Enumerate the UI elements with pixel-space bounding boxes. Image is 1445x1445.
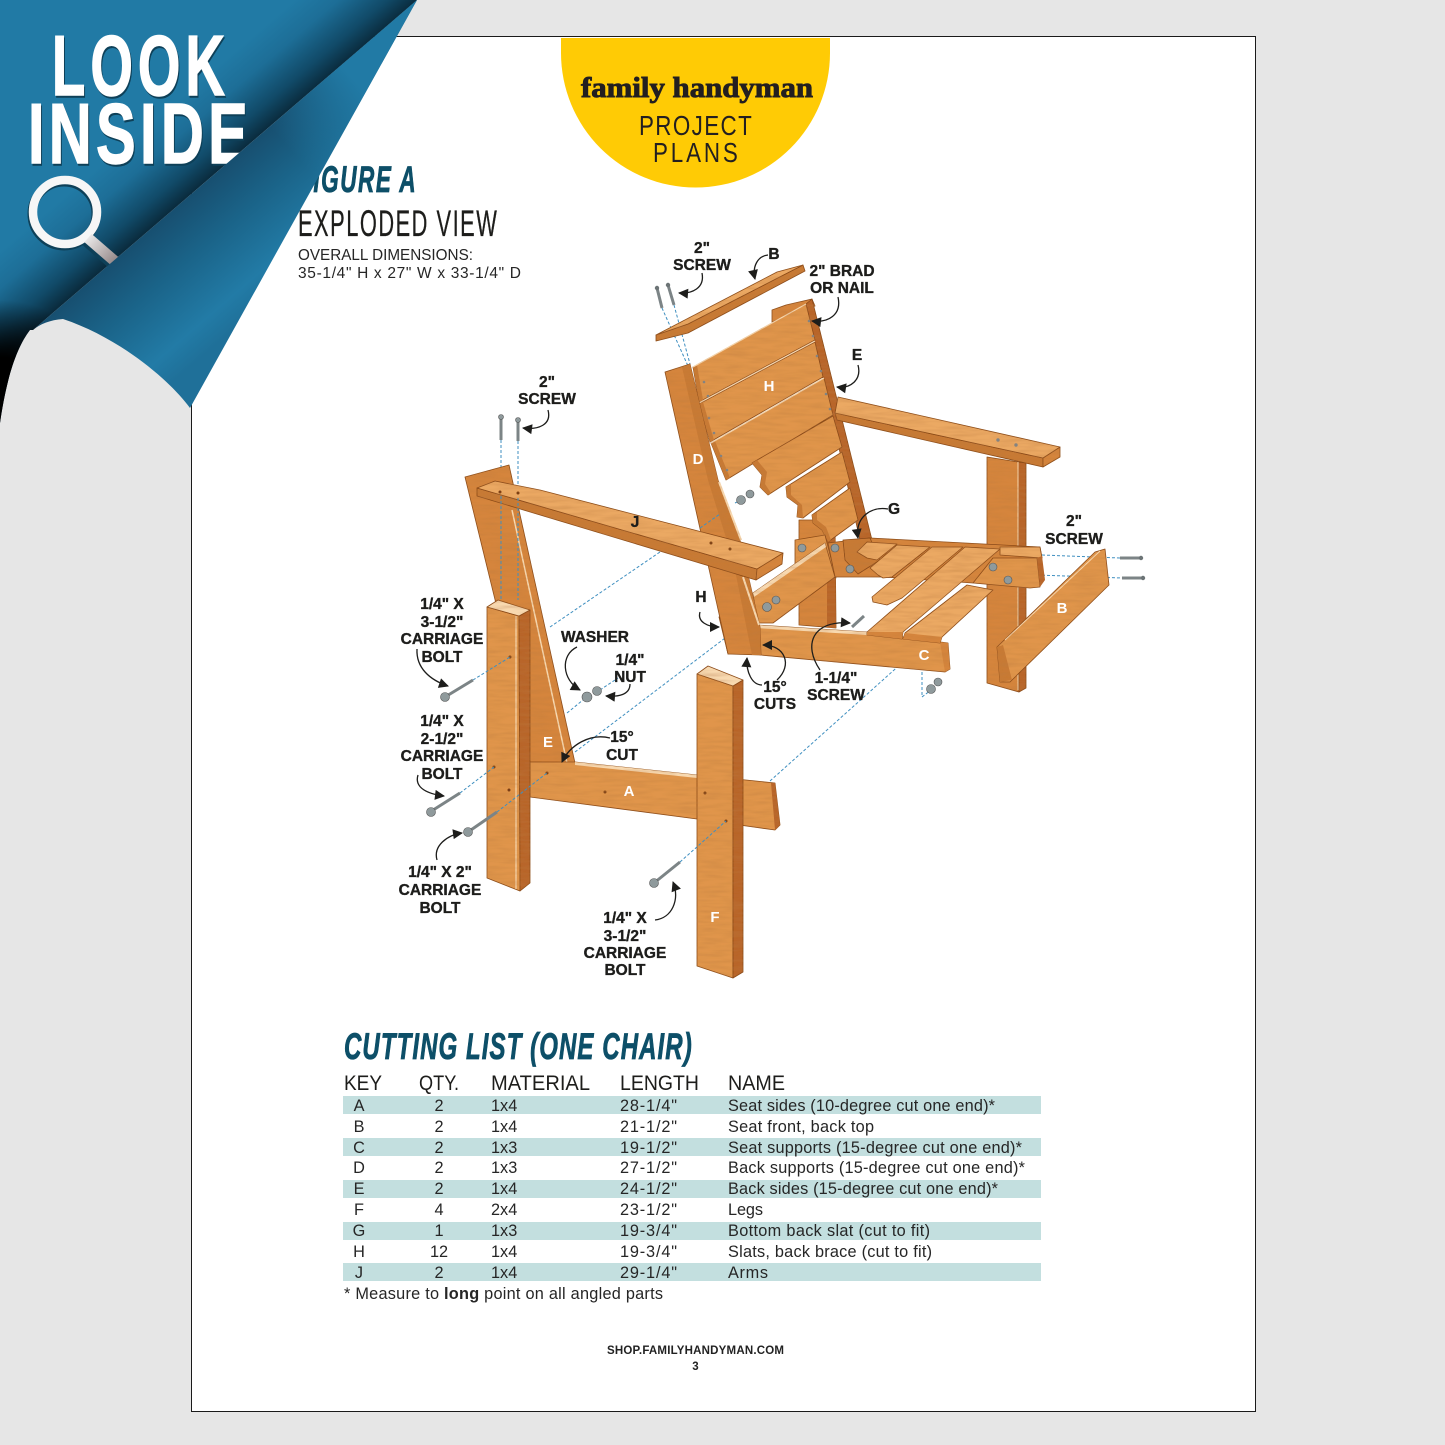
hardware callout labels: 1/4" X xyxy=(603,910,647,927)
name column: Back supports (15-degree cut one end)* xyxy=(728,1159,1026,1177)
flap highlight near apex xyxy=(33,0,417,408)
heading: exploded view: EXPLODED VIEW xyxy=(298,204,497,245)
hardware callout labels: 15° xyxy=(610,729,634,746)
hardware callout labels: OR NAIL xyxy=(810,280,874,297)
hardware: bolts and washers on chair xyxy=(736,490,1012,694)
right arm xyxy=(835,397,1060,467)
name column: Seat front, back top xyxy=(728,1118,874,1136)
hardware callout labels: 2" BRAD xyxy=(809,263,875,280)
seat slats xyxy=(857,542,1000,643)
quantity column: 2 xyxy=(434,1139,444,1157)
material column: 1x4 xyxy=(491,1243,517,1261)
table header: LENGTH xyxy=(620,1072,699,1095)
carriage bolts and nut xyxy=(426,414,680,888)
exploded chair illustration xyxy=(399,240,1145,979)
table header xyxy=(344,1072,785,1095)
hardware callout labels: CARRIAGE xyxy=(399,882,481,899)
footnote: * Measure to long point on all angled parts xyxy=(344,1285,663,1303)
look inside text: INSIDE xyxy=(28,87,248,182)
dashed guide lines over parts xyxy=(460,496,741,862)
row bands xyxy=(343,1096,1041,1281)
part key letters: H xyxy=(764,378,774,395)
length column: 23-1/2" xyxy=(620,1201,677,1219)
quantity column: 2 xyxy=(434,1264,444,1282)
wood parts xyxy=(465,265,1109,978)
hardware callout labels: SCREW xyxy=(673,257,731,274)
overall dimensions: 35-1/4" H x 27" W x 33-1/4" D xyxy=(298,265,521,282)
key column: G xyxy=(353,1222,365,1240)
back top board B xyxy=(656,265,805,341)
hardware callout labels: BOLT xyxy=(419,900,461,917)
heading: figure A: FIGURE A xyxy=(298,159,416,200)
back slats H xyxy=(693,299,872,542)
hardware callout labels: SCREW xyxy=(518,391,576,408)
callout arrows xyxy=(417,255,888,920)
quantity column: 4 xyxy=(434,1201,444,1219)
hardware callout labels: 2" xyxy=(1066,513,1082,530)
dashed guide lines behind parts xyxy=(501,305,1122,781)
hardware callout labels: CUTS xyxy=(754,696,796,713)
arm J xyxy=(477,481,783,580)
material column: 1x4 xyxy=(491,1097,517,1115)
material column: 2x4 xyxy=(491,1201,517,1219)
page curl banner xyxy=(0,0,417,423)
seat side C xyxy=(757,625,950,672)
seat side A xyxy=(530,762,780,830)
material column: 1x4 xyxy=(491,1180,517,1198)
overall dimensions: OVERALL DIMENSIONS: xyxy=(298,247,473,264)
part key letters: J xyxy=(631,514,639,531)
name column: Bottom back slat (cut to fit) xyxy=(728,1222,930,1240)
footer url and page number xyxy=(607,1345,784,1373)
length column: 29-1/4" xyxy=(620,1264,677,1282)
part key letters: D xyxy=(693,451,704,468)
page sheet xyxy=(192,36,1256,1412)
part key letters xyxy=(543,246,1068,926)
hardware callout labels: 15° xyxy=(763,679,787,696)
overall dimensions xyxy=(298,247,521,282)
hardware callout labels: NUT xyxy=(614,669,646,686)
right leg xyxy=(987,457,1026,692)
footer url and page number: SHOP.FAMILYHANDYMAN.COM xyxy=(607,1345,784,1357)
length column: 21-1/2" xyxy=(620,1118,677,1136)
logo badge xyxy=(561,38,830,188)
length column: 19-3/4" xyxy=(620,1222,677,1240)
hardware callout labels: 1/4" X xyxy=(420,713,464,730)
hardware callout labels: 3-1/2" xyxy=(604,928,646,945)
name column: Back sides (15-degree cut one end)* xyxy=(728,1180,999,1198)
footer url and page number: 3 xyxy=(692,1361,699,1373)
hardware callout labels xyxy=(399,240,1103,979)
length column: 28-1/4" xyxy=(620,1097,677,1115)
part key letters: F xyxy=(710,909,720,926)
rear leg xyxy=(799,520,836,628)
hardware callout labels: 1/4" X 2" xyxy=(408,864,472,881)
back brace and seat frame xyxy=(795,535,1045,588)
look inside text: LOOK xyxy=(53,21,226,116)
table header: QTY. xyxy=(419,1072,459,1095)
material column: 1x3 xyxy=(491,1159,517,1177)
small H brace end xyxy=(719,614,735,654)
material column: 1x3 xyxy=(491,1222,517,1240)
logo badge: PLANS xyxy=(653,138,738,169)
key column: D xyxy=(353,1159,365,1177)
name column: Slats, back brace (cut to fit) xyxy=(728,1243,932,1261)
part key letters: G xyxy=(888,501,900,518)
table header: MATERIAL xyxy=(491,1072,590,1095)
page edge below flap xyxy=(190,408,192,423)
cutting list table xyxy=(343,1072,1041,1282)
key column: H xyxy=(353,1243,365,1261)
inner seat support xyxy=(753,543,835,623)
key column xyxy=(353,1097,365,1282)
name column: Seat supports (15-degree cut one end)* xyxy=(728,1139,1023,1157)
hardware callout labels: CUT xyxy=(606,747,638,764)
hardware callout labels: 2-1/2" xyxy=(421,731,463,748)
material column: 1x3 xyxy=(491,1139,517,1157)
part key letters: C xyxy=(919,647,930,664)
length column: 24-1/2" xyxy=(620,1180,677,1198)
hardware callout labels: BOLT xyxy=(421,766,463,783)
key column: F xyxy=(354,1201,364,1219)
look inside text xyxy=(28,19,249,184)
name column xyxy=(728,1097,1026,1282)
hardware callout labels: 2" xyxy=(694,240,710,257)
quantity column: 2 xyxy=(434,1159,444,1177)
cutting list heading: CUTTING LIST (ONE CHAIR) xyxy=(344,1026,692,1067)
curl underside xyxy=(0,0,417,423)
key column: B xyxy=(354,1118,364,1136)
look inside text: INSIDE xyxy=(29,89,249,184)
hardware callout labels: 1/4" xyxy=(616,652,644,669)
hardware callout labels: SCREW xyxy=(807,687,865,704)
quantity column: 12 xyxy=(430,1243,448,1261)
front board B xyxy=(997,549,1109,682)
back side E xyxy=(465,465,575,763)
key column: J xyxy=(355,1264,363,1282)
part key letters: E xyxy=(543,734,553,751)
part key letters: B xyxy=(1057,600,1068,617)
key column: C xyxy=(353,1139,365,1157)
back support D xyxy=(665,364,761,655)
material column: 1x4 xyxy=(491,1118,517,1136)
hardware callout labels: CARRIAGE xyxy=(584,945,666,962)
hardware callout labels: 1-1/4" xyxy=(815,670,857,687)
table header: KEY xyxy=(344,1072,382,1095)
length column: 19-3/4" xyxy=(620,1243,677,1261)
icon: magnifying glass xyxy=(32,180,118,268)
hardware callout labels: SCREW xyxy=(1045,531,1103,548)
name column: Legs xyxy=(728,1201,763,1219)
curl flap xyxy=(33,0,417,408)
key column: E xyxy=(354,1180,365,1198)
hardware callout labels: BOLT xyxy=(421,649,463,666)
hardware callout labels: 1/4" X xyxy=(420,596,464,613)
look inside text: LOOK xyxy=(52,19,225,114)
material column xyxy=(491,1097,517,1282)
curl lower shadow xyxy=(0,0,417,423)
quantity column xyxy=(430,1097,448,1282)
left front leg F xyxy=(487,600,530,891)
quantity column: 2 xyxy=(434,1097,444,1115)
table header: NAME xyxy=(728,1072,785,1095)
hardware callout labels: BOLT xyxy=(604,962,646,979)
part key letters: A xyxy=(624,783,635,800)
part key letters: H xyxy=(695,589,707,606)
part key letters: E xyxy=(852,347,862,364)
length column: 27-1/2" xyxy=(620,1159,677,1177)
logo badge: PROJECT xyxy=(639,111,752,142)
key column: A xyxy=(354,1097,365,1115)
length column: 19-1/2" xyxy=(620,1139,677,1157)
quantity column: 1 xyxy=(434,1222,444,1240)
material column: 1x4 xyxy=(491,1264,517,1282)
name column: Arms xyxy=(728,1264,768,1282)
screws xyxy=(501,283,1145,580)
hardware callout labels: 2" xyxy=(539,374,555,391)
hardware callout labels: WASHER xyxy=(561,629,629,646)
right front leg F xyxy=(697,666,743,978)
part key letters: B xyxy=(768,246,780,263)
hardware callout labels: CARRIAGE xyxy=(401,748,483,765)
length column xyxy=(620,1097,677,1282)
quantity column: 2 xyxy=(434,1180,444,1198)
hardware callout labels: 3-1/2" xyxy=(421,614,463,631)
hardware callout labels: CARRIAGE xyxy=(401,631,483,648)
quantity column: 2 xyxy=(434,1118,444,1136)
logo badge: family handyman xyxy=(581,72,813,104)
name column: Seat sides (10-degree cut one end)* xyxy=(728,1097,996,1115)
